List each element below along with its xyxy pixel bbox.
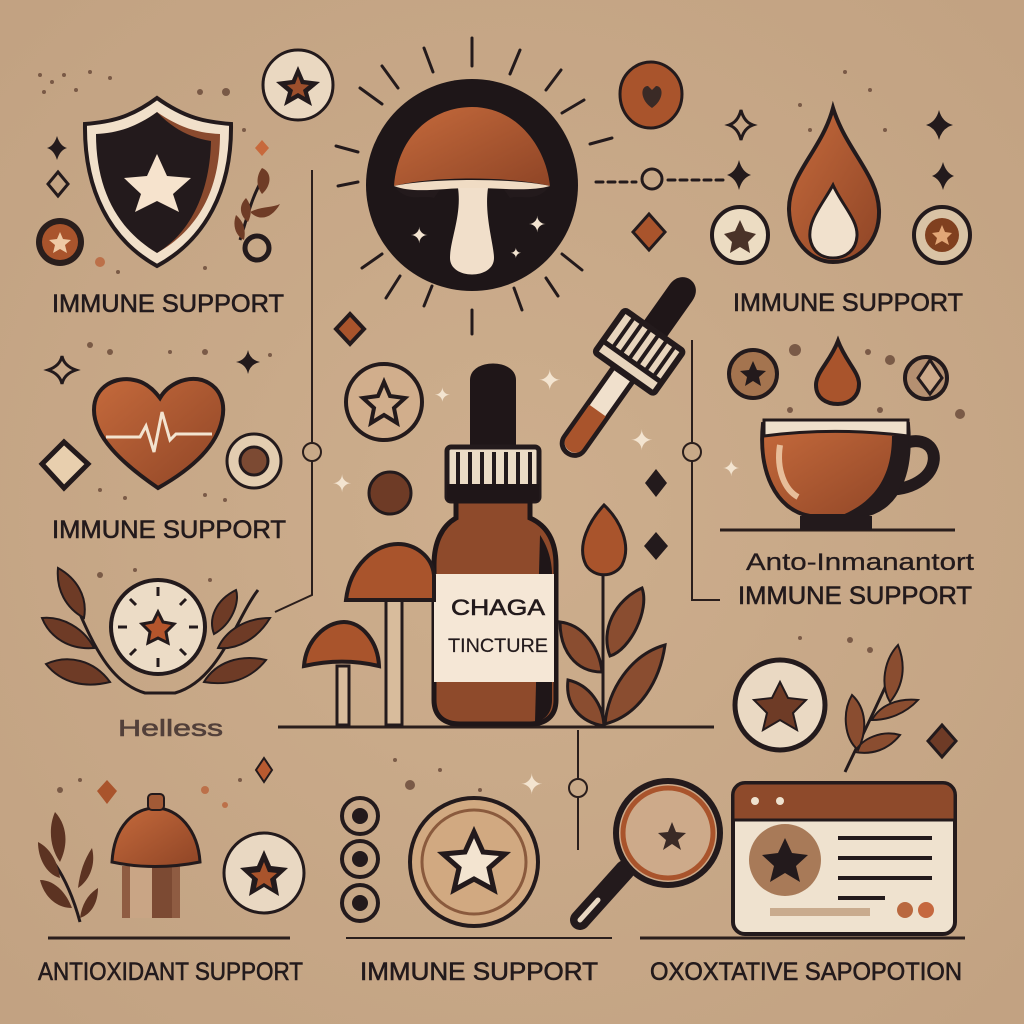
icon: central mushroom emblem: ✦ xyxy=(528,212,546,237)
connector lines xyxy=(48,170,965,938)
icon: central star medallions and sparkles: ✦ xyxy=(538,365,561,396)
bottle label text: CHAGA xyxy=(451,595,545,620)
decorative speckles xyxy=(38,70,965,808)
icon: chaga tincture bottle xyxy=(434,364,556,724)
icon: heart with pulse xyxy=(42,350,281,488)
heading: immune support 4: IMMUNE SUPPORT xyxy=(733,289,963,317)
icon: lantern mushroom with sprig xyxy=(38,758,304,922)
heading: antioxidant support: ANTIOXIDANT SUPPORT xyxy=(38,958,303,986)
icon: central mushroom emblem xyxy=(336,38,724,334)
icon: mushrooms left of bottle xyxy=(304,544,434,725)
heading: immune support 5: IMMUNE SUPPORT xyxy=(738,582,972,610)
icon: clock wreath xyxy=(42,568,270,693)
icon: central star medallions and sparkles: ✦ xyxy=(520,769,543,800)
heading: immune support 3: IMMUNE SUPPORT xyxy=(360,958,598,986)
icon: central mushroom emblem: ✦ xyxy=(510,245,522,261)
icon: sprig with ring xyxy=(234,168,280,260)
icon: star and leaf xyxy=(735,645,956,772)
icon: star medallion xyxy=(410,798,538,926)
icon: central star medallions and sparkles xyxy=(332,62,740,800)
icon: browser card xyxy=(733,783,955,934)
icon: shield with star xyxy=(85,98,231,266)
icon: stacked rings xyxy=(342,798,378,921)
heading: immune support 1: IMMUNE SUPPORT xyxy=(52,290,284,318)
icon: chaga tincture bottle: TINCTURE xyxy=(448,636,548,657)
icon: top left decorations xyxy=(36,50,333,266)
icon: tea cup xyxy=(762,420,934,530)
heading: immune support 2: IMMUNE SUPPORT xyxy=(52,516,286,544)
icon: water drop xyxy=(712,108,970,263)
heading: anti-inflammatory: Anto-Inmanantort xyxy=(746,549,974,576)
icon: plant right of bottle xyxy=(560,505,665,726)
icon: small drop and medallions xyxy=(729,341,947,404)
icon: central star medallions and sparkles: ✦ xyxy=(434,385,451,407)
icon: magnifying glass xyxy=(580,781,720,920)
icon: central mushroom emblem: ✦ xyxy=(410,223,428,248)
heading: helless: Helless xyxy=(118,715,223,741)
icon: central star medallions and sparkles: ✦ xyxy=(722,456,740,481)
heading: oxidative absorption: OXOXTATIVE SAPOPOTION xyxy=(650,958,962,986)
icon: central star medallions and sparkles: ✦ xyxy=(630,425,653,456)
icon: dropper xyxy=(538,259,720,474)
icon: central star medallions and sparkles: ✦ xyxy=(332,471,352,498)
